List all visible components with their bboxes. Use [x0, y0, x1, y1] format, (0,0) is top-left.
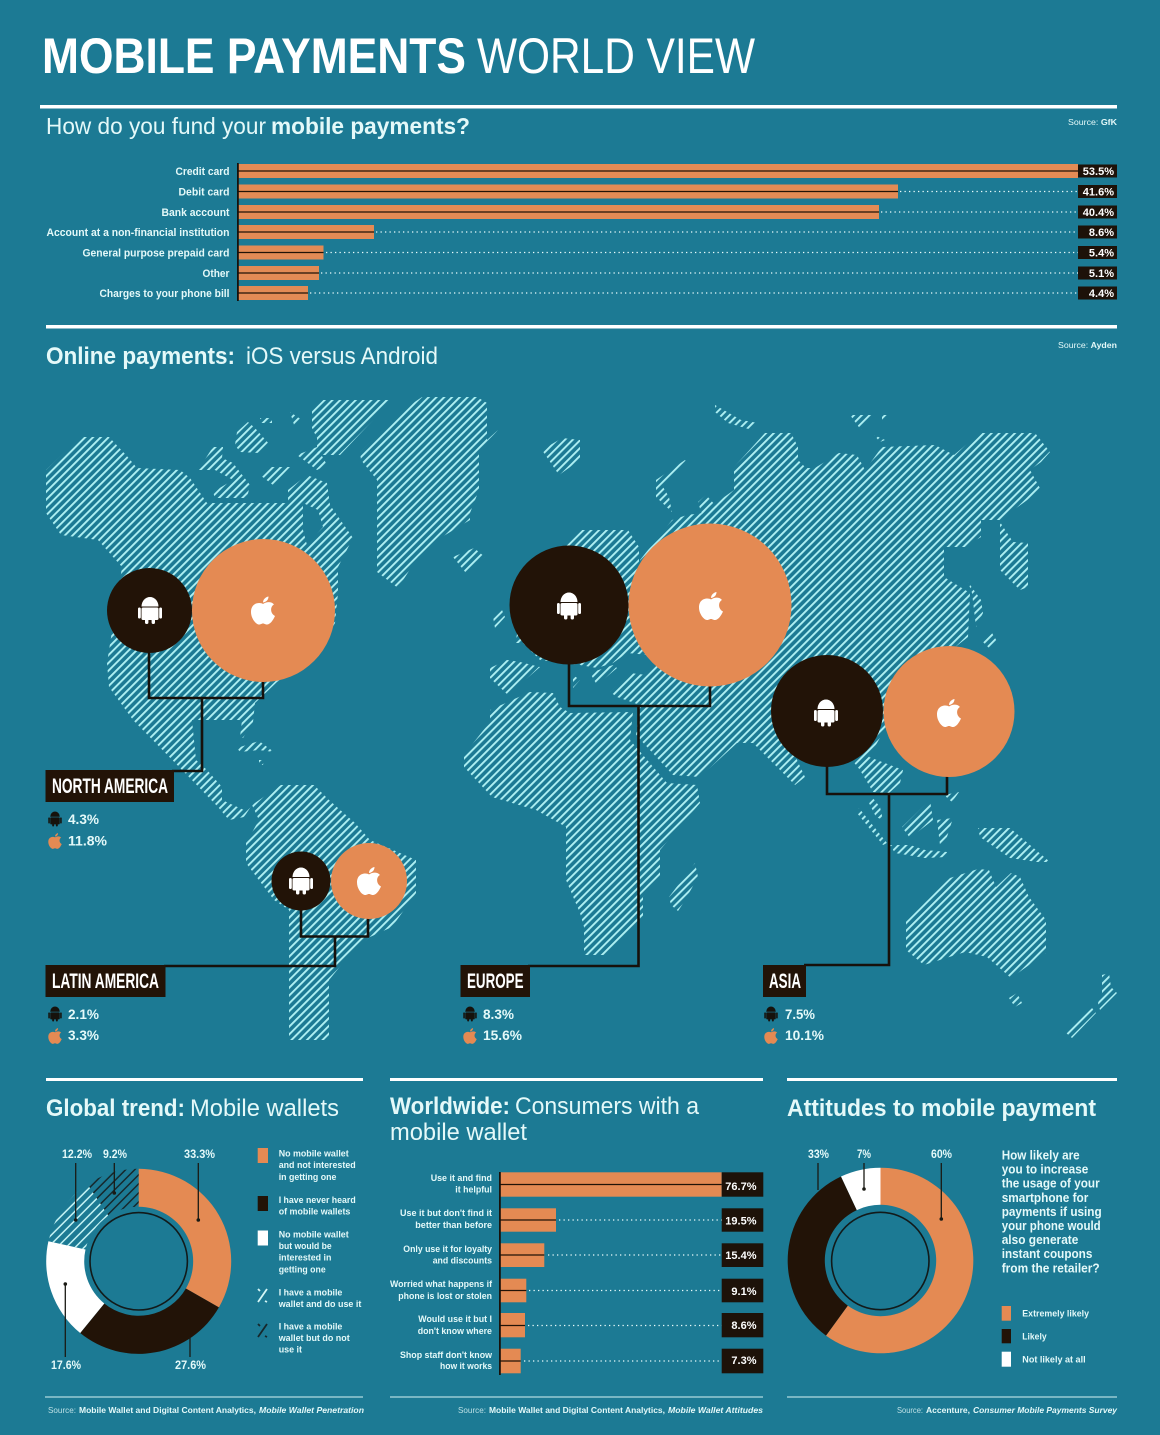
region: Europe [460, 965, 530, 1044]
bar chart: consumers with a wallet: better than before [415, 1220, 492, 1231]
bar chart: consumers with a wallet: Use it and find [431, 1173, 492, 1184]
bar chart: funding: 5.1% [1089, 268, 1114, 280]
source: attitudes [458, 1405, 763, 1415]
bar chart: consumers with a wallet: Only use it for loyalty [403, 1244, 493, 1255]
region: Latin America: 2.1% [68, 1007, 99, 1022]
heading: worldwide: Worldwide: [390, 1093, 510, 1120]
question text: instant coupons [1002, 1247, 1092, 1261]
region: North America: 4.3% [68, 812, 99, 827]
source: Accenture: Source: [897, 1405, 923, 1415]
source: penetration: Mobile Wallet Penetration [259, 1405, 364, 1415]
source: Ayden: Source: Ayden [1058, 340, 1117, 350]
source: Accenture [897, 1405, 1118, 1415]
region: Latin America: LATIN AMERICA [52, 970, 159, 993]
source: attitudes: Mobile Wallet Attitudes [668, 1405, 763, 1415]
bar chart: funding: Credit card [176, 166, 230, 178]
question text: payments if using [1002, 1205, 1102, 1219]
question text: also generate [1002, 1233, 1078, 1247]
heading: global trend: Global trend: [46, 1095, 185, 1122]
bar chart: consumers with a wallet: phone is lost or stolen [398, 1291, 492, 1302]
bar chart: consumers with a wallet: Would use it but I [418, 1314, 492, 1325]
bar chart: funding: Account at a non-financial institution [46, 227, 230, 239]
question text: your phone would [1002, 1219, 1101, 1233]
source: GfK: Source: GfK [1068, 117, 1118, 127]
legend: attitudes: Not likely at all [1022, 1354, 1086, 1366]
connector: Latin America [164, 910, 368, 966]
legend: mobile wallets: I have a mobile [279, 1322, 342, 1332]
bar chart: funding: 41.6% [1083, 186, 1114, 198]
heading: global trend [46, 1095, 339, 1122]
bar chart: consumers with a wallet: 8.6% [731, 1320, 757, 1332]
heading: how do you fund: How do you fund your [46, 113, 266, 139]
heading: global trend: Mobile wallets [190, 1095, 339, 1122]
bar chart: funding: Charges to your phone bill [100, 288, 230, 300]
legend: mobile wallets: I have a mobile [279, 1288, 342, 1298]
legend: mobile wallets: No mobile wallet [279, 1230, 349, 1240]
donut chart: mobile wallets: 9.2% [103, 1149, 127, 1161]
legend: mobile wallets: No mobile wallet [279, 1148, 349, 1160]
legend: mobile wallets: wallet and do use it [278, 1299, 362, 1310]
question text [1002, 1148, 1102, 1275]
bar chart: consumers with a wallet: 15.4% [725, 1250, 757, 1262]
region: Asia [763, 965, 824, 1044]
legend: mobile wallets: interested in [279, 1252, 332, 1264]
connector: Asia [804, 766, 947, 965]
donut chart: attitudes: 33% [808, 1149, 829, 1161]
question text: How likely are [1002, 1148, 1080, 1162]
question text: from the retailer? [1002, 1261, 1100, 1275]
legend: attitudes [1002, 1306, 1090, 1367]
region: Europe: 8.3% [483, 1007, 514, 1022]
legend: mobile wallets: and not interested [279, 1160, 356, 1171]
region: Europe: 15.6% [483, 1028, 522, 1043]
bar chart: consumers with a wallet: it helpful [455, 1184, 492, 1196]
connector: North America [149, 652, 263, 771]
region: North America: 11.8% [68, 834, 107, 848]
heading: worldwide: mobile wallet [390, 1119, 527, 1146]
bar chart: consumers with a wallet: how it works [440, 1361, 492, 1372]
question text: the usage of your [1002, 1177, 1100, 1191]
bar chart: consumers with a wallet: Worried what happens if [390, 1279, 493, 1290]
title: MOBILE PAYMENTS [42, 28, 466, 84]
legend: mobile wallets: of mobile wallets [279, 1206, 350, 1218]
donut chart: mobile wallets: 12.2% [62, 1149, 92, 1161]
region: North America: NORTH AMERICA [52, 775, 168, 798]
region: Europe: EUROPE [467, 970, 524, 993]
donut chart: attitudes: 7% [857, 1149, 871, 1161]
heading: online payments: Online payments: [46, 343, 235, 370]
source: penetration: Mobile Wallet and Digital Content Analytics, [79, 1405, 256, 1415]
bar chart: consumers with a wallet: don't know where [418, 1326, 492, 1337]
bubbles: Europe [510, 524, 792, 686]
heading: how do you fund: mobile payments? [271, 113, 470, 139]
source: attitudes: Mobile Wallet and Digital Content Analytics, [489, 1405, 665, 1415]
bar chart: funding: 53.5% [1083, 166, 1114, 178]
donut chart: mobile wallets: 33.3% [184, 1149, 215, 1161]
connector: Europe [528, 663, 710, 966]
donut chart: mobile wallets [46, 1149, 231, 1372]
donut chart: mobile wallets: 17.6% [51, 1360, 81, 1372]
region: Asia: 10.1% [785, 1028, 824, 1043]
heading: worldwide: Consumers with a [515, 1093, 700, 1120]
bubbles: Latin America [272, 843, 407, 919]
bar chart: consumers with a wallet: 19.5% [725, 1216, 757, 1228]
legend: attitudes: Extremely likely [1022, 1308, 1090, 1320]
legend: mobile wallets: wallet but do not [278, 1333, 350, 1344]
bar chart: funding: 40.4% [1083, 207, 1114, 219]
title [42, 28, 756, 84]
heading: worldwide [390, 1093, 700, 1146]
heading: online payments [46, 343, 438, 370]
legend: mobile wallets: in getting one [279, 1172, 336, 1183]
region: Latin America: 3.3% [68, 1028, 99, 1043]
bar chart: funding: 5.4% [1089, 248, 1114, 260]
bubbles: Asia [771, 646, 1014, 777]
donut chart: mobile wallets: 27.6% [175, 1360, 206, 1372]
legend: attitudes: Likely [1022, 1332, 1047, 1342]
question text: you to increase [1002, 1163, 1088, 1177]
source: Accenture: Consumer Mobile Payments Survey [973, 1405, 1118, 1415]
legend: mobile wallets: getting one [279, 1264, 326, 1276]
bar chart: funding: Debit card [178, 186, 230, 198]
heading: how do you fund [46, 113, 470, 139]
source: attitudes: Source: [458, 1405, 486, 1415]
bar chart: consumers with a wallet: 9.1% [731, 1286, 757, 1298]
donut chart: attitudes: 60% [931, 1149, 952, 1161]
bar chart: funding: 4.4% [1089, 288, 1114, 300]
legend: mobile wallets: but would be [279, 1241, 332, 1252]
bar chart: consumers with a wallet: Use it but don't find it [400, 1208, 493, 1219]
region: North America [46, 770, 174, 849]
donut chart: attitudes [788, 1149, 973, 1353]
source: penetration: Source: [48, 1405, 76, 1415]
region: Asia: 7.5% [785, 1007, 815, 1022]
question text: smartphone for [1002, 1191, 1089, 1205]
bar chart: funding: 8.6% [1089, 227, 1114, 239]
bar chart: funding: General purpose prepaid card [82, 248, 230, 260]
source: penetration [48, 1405, 364, 1415]
heading: attitudes: Attitudes to mobile payment [787, 1095, 1096, 1122]
legend: mobile wallets [258, 1148, 362, 1356]
bar chart: funding: Bank account [162, 207, 230, 219]
bar chart: funding [46, 163, 1117, 301]
bar chart: funding: Other [202, 268, 230, 280]
bar chart: consumers with a wallet: Shop staff don't know [400, 1350, 493, 1361]
bar chart: consumers with a wallet [390, 1172, 763, 1375]
source: Accenture: Accenture, [926, 1405, 970, 1415]
world map [46, 397, 1117, 1040]
bar chart: consumers with a wallet: 7.3% [731, 1355, 757, 1367]
bubbles: North America [107, 539, 335, 682]
region: Latin America [46, 965, 166, 1044]
heading: online payments: iOS versus Android [246, 343, 438, 370]
bar chart: consumers with a wallet: 76.7% [725, 1181, 757, 1193]
region: Asia: ASIA [769, 970, 801, 993]
bar chart: consumers with a wallet: and discounts [433, 1256, 492, 1266]
title: WORLD VIEW [477, 28, 756, 84]
legend: mobile wallets: use it [279, 1344, 303, 1356]
legend: mobile wallets: I have never heard [279, 1195, 356, 1206]
